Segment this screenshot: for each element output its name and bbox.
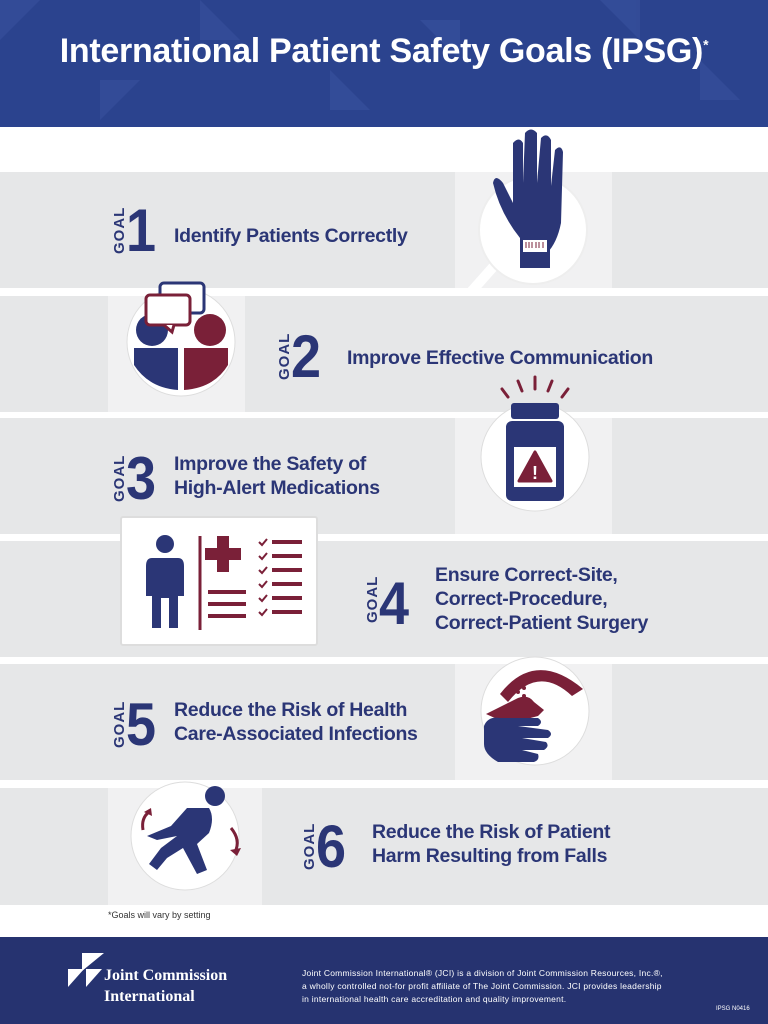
header xyxy=(0,0,768,127)
goal 2 label: 2 xyxy=(291,323,318,390)
goal 2 label: Improve Effective Communication xyxy=(347,347,653,369)
icon: hand with wristband xyxy=(468,130,586,288)
goal 3 label: 3 xyxy=(126,445,153,512)
goal 4 label: 4 xyxy=(379,570,406,637)
goal 5 label: Reduce the Risk of Health xyxy=(174,699,407,721)
goal 3 label: High-Alert Medications xyxy=(174,477,380,499)
goal 2 label: GOAL xyxy=(276,333,293,380)
panel: goal 3 xyxy=(0,418,768,534)
footer text xyxy=(302,968,663,1004)
goal 5 label xyxy=(111,691,418,758)
goal 1 label: 1 xyxy=(126,197,153,264)
logo xyxy=(68,953,227,1005)
panel: goal 2 xyxy=(0,296,768,412)
icon: medication bottle xyxy=(480,376,590,512)
icon: medication bottle: ! xyxy=(532,463,538,483)
footer text: Joint Commission International® (JCI) is a division of Joint Commission Resources, Inc.®, xyxy=(302,968,663,978)
footer xyxy=(0,937,768,1024)
panel: goal 1 xyxy=(0,172,768,288)
title: International Patient Safety Goals (IPSG)* xyxy=(60,32,708,70)
goal 3 label: GOAL xyxy=(111,455,128,502)
logo: International xyxy=(104,988,195,1005)
goal 6 label: GOAL xyxy=(301,823,318,870)
goal 1 label xyxy=(111,197,408,264)
goal 3 label: Improve the Safety of xyxy=(174,453,366,475)
goal 4 label: Correct-Patient Surgery xyxy=(435,612,648,634)
goal 6 label: Reduce the Risk of Patient xyxy=(372,821,610,843)
footer: IPSG N0416 xyxy=(716,1006,750,1012)
goal 1 label: GOAL xyxy=(111,207,128,254)
footer text: in international health care accreditation and quality improvement. xyxy=(302,994,566,1004)
icon: hand washing xyxy=(480,656,590,766)
goal 4 label: GOAL xyxy=(364,576,381,623)
goal 6 label: 6 xyxy=(316,813,343,880)
goal 3 label xyxy=(111,445,380,512)
panel: goal 6 xyxy=(0,788,768,905)
goal 1 label: Identify Patients Correctly xyxy=(174,225,408,247)
goal 2 label xyxy=(276,323,653,390)
goal 4 label: Ensure Correct-Site, xyxy=(435,564,618,586)
goal 4 label: Correct-Procedure, xyxy=(435,588,607,610)
footnote: *Goals will vary by setting xyxy=(108,910,211,920)
panel: goal 5 xyxy=(0,664,768,780)
goal 5 label: Care-Associated Infections xyxy=(174,723,418,745)
panel: goal 4 xyxy=(0,541,768,657)
footer text: a wholly controlled not-for profit affiliate of The Joint Commission. JCI provides leadership xyxy=(302,981,662,991)
goal 5 label: GOAL xyxy=(111,701,128,748)
icon: falling person xyxy=(130,782,241,890)
icon: communication xyxy=(126,282,236,396)
goal 5 label: 5 xyxy=(126,691,153,758)
logo: Joint Commission xyxy=(104,967,227,984)
goal 6 label: Harm Resulting from Falls xyxy=(372,845,607,867)
icon: surgery checklist xyxy=(120,516,318,646)
goal 4 label xyxy=(364,564,648,637)
goal 6 label xyxy=(301,813,610,880)
